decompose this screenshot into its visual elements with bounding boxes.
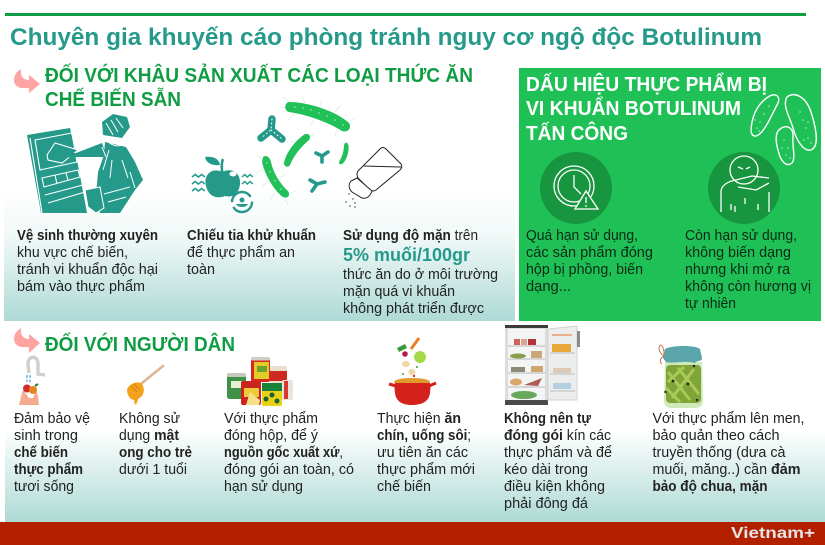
text: cleaning: khu vực chế biến,: [17, 245, 128, 261]
text: cooked food: chín, uống sôi;: [377, 428, 471, 444]
text: canned food: [224, 411, 354, 495]
text: cooked food: ưu tiên ăn các: [377, 445, 468, 461]
heading: production stage: [45, 63, 473, 111]
text: irradiation: để thực phẩm an: [187, 245, 295, 261]
text: cleaning: Vệ sinh thường xuyên: [17, 228, 158, 244]
heading: production stage: CHẾ BIẾN SẴN: [45, 88, 181, 111]
footer bar: [0, 522, 825, 545]
text: still in date: [685, 228, 811, 312]
heading: consumers: ĐỐI VỚI NGƯỜI DÂN: [45, 332, 235, 356]
panel: warning signs: [519, 68, 821, 321]
text: canned food: đóng hộp, để ý: [224, 428, 319, 444]
text: cleaning: bám vào thực phẩm: [17, 279, 145, 295]
panel: consumers background: [5, 430, 825, 522]
text: canned food: nguồn gốc xuất xứ,: [224, 445, 343, 461]
text: cleaning: tránh vi khuẩn độc hại: [17, 262, 158, 278]
icon: food cans: [227, 357, 293, 406]
text: cooked food: thực phẩm mới: [377, 462, 475, 478]
text: hygiene: [14, 411, 90, 495]
icon: open fridge: [505, 325, 580, 405]
text: salinity: Sử dụng độ mặn trên: [343, 228, 478, 244]
text: still in date: nhưng khi mở ra: [685, 262, 791, 278]
text: fermented food: truyền thống (dưa cà: [652, 445, 786, 461]
text: packaging: Không nên tự: [504, 411, 591, 427]
text: expired: hộp bị phồng, biến: [526, 262, 643, 278]
text: hygiene: Đảm bảo vệ: [14, 411, 90, 427]
panel: production stage background: [4, 190, 515, 321]
text: expired: dạng...: [526, 279, 571, 295]
text: cooked food: chế biến: [377, 479, 431, 495]
heading: warning signs: DẤU HIỆU THỰC PHẨM BỊ: [526, 72, 767, 96]
text: salinity: không phát triển được: [343, 301, 484, 317]
text: packaging: kéo dài trong: [504, 462, 588, 478]
icon: washing hands: [19, 357, 45, 405]
text: canned food: Với thực phẩm: [224, 411, 318, 427]
icon: worker cleaning machine: [27, 114, 143, 213]
text: still in date: không còn hương vị: [685, 279, 811, 295]
icon: salt shaker: [345, 148, 402, 208]
text: packaging: [504, 411, 612, 512]
text: salinity: 5% muối/100gr: [343, 245, 470, 265]
text: salinity: [343, 228, 498, 317]
icon: pickle jar: [659, 345, 703, 408]
text: still in date: không biến dạng: [685, 245, 791, 261]
text: packaging: đóng gói kín các: [504, 428, 611, 444]
text: irradiation: [187, 228, 316, 278]
text: honey: dưới 1 tuổi: [119, 462, 187, 478]
icon: teal spores: [261, 119, 328, 191]
text: canned food: hạn sử dụng: [224, 479, 303, 495]
heading: warning signs: TẤN CÔNG: [526, 121, 628, 145]
text: fermented food: [652, 411, 804, 495]
top rule: [5, 13, 806, 16]
heading: warning signs: [526, 72, 767, 145]
text: honey: [119, 411, 192, 478]
text: packaging: phải đông đá: [504, 496, 589, 512]
text: honey: Không sử: [119, 411, 180, 427]
text: honey: dụng mật: [119, 428, 179, 444]
icon: cooking pot: [389, 338, 436, 405]
heading: production stage: ĐỐI VỚI KHÂU SẢN XUẤT CÁC LOẠI THỨC ĂN: [45, 63, 473, 87]
text: packaging: thực phẩm và để: [504, 445, 612, 461]
text: fermented food: Với thực phẩm lên men,: [652, 411, 804, 427]
text: packaging: điều kiện không: [504, 479, 605, 495]
icon: expired clock: [540, 152, 612, 224]
text: expired: các sản phẩm đóng: [526, 245, 653, 261]
text: salinity: thức ăn do ở môi trường: [343, 267, 498, 283]
text: hygiene: tươi sống: [14, 479, 74, 495]
text: cooked food: [377, 411, 475, 495]
logo: Vietnam+: Vietnam+: [731, 525, 815, 542]
title: Chuyên gia khuyến cáo phòng tránh nguy cơ ngộ độc Botulinum: [10, 24, 762, 51]
text: fermented food: bảo độ chua, mặn: [652, 479, 768, 495]
icon: green bacteria: [256, 96, 354, 205]
text: expired: Quá hạn sử dụng,: [526, 228, 638, 244]
icon: honey dipper: [127, 366, 163, 405]
icon: white bacteria: [751, 95, 816, 165]
text: cleaning: [17, 228, 158, 295]
text: hygiene: thực phẩm: [14, 462, 83, 478]
icon: apple with waves: [192, 157, 253, 212]
text: fermented food: muối, măng..) cần đảm: [652, 462, 800, 478]
text: still in date: Còn hạn sử dụng,: [685, 228, 797, 244]
icon: arrow production: [14, 69, 40, 93]
icon: arrow consumers: [14, 328, 40, 353]
heading: warning signs: VI KHUẨN BOTULINUM: [526, 97, 741, 120]
text: fermented food: bảo quản theo cách: [652, 428, 780, 444]
text: honey: ong cho trẻ: [119, 445, 192, 461]
text: salinity: mặn quá vi khuẩn: [343, 284, 455, 300]
text: hygiene: sinh trong: [14, 428, 78, 444]
text: expired: [526, 228, 653, 295]
text: still in date: tự nhiên: [685, 296, 736, 312]
text: irradiation: toàn: [187, 262, 215, 278]
text: irradiation: Chiếu tia khử khuẩn: [187, 228, 316, 244]
icon: person covering nose: [708, 152, 780, 224]
text: cooked food: Thực hiện ăn: [377, 411, 461, 427]
text: canned food: đóng gói an toàn, có: [224, 462, 354, 478]
text: hygiene: chế biến: [14, 445, 68, 461]
